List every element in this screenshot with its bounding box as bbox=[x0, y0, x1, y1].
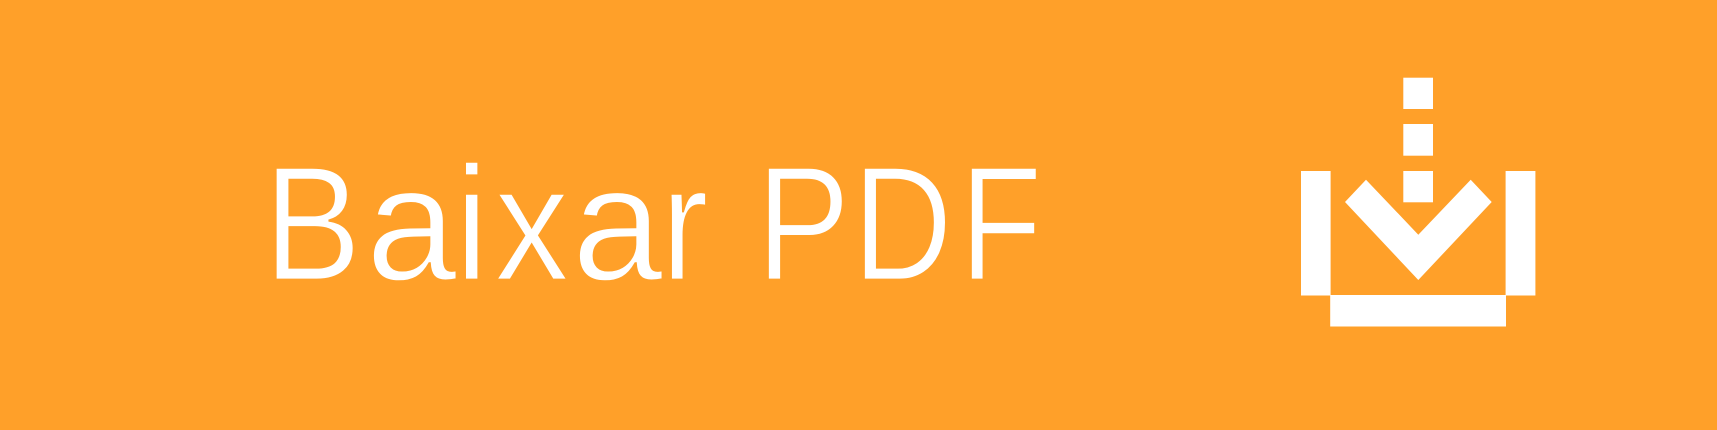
arrow head: chevron bbox=[1345, 180, 1492, 280]
heading: Baixar PDF: x bbox=[495, 133, 569, 315]
heading: Baixar PDF: a bbox=[366, 134, 457, 315]
heading: Baixar PDF: i bbox=[455, 134, 489, 315]
heading: Baixar PDF: F bbox=[960, 133, 1042, 315]
heading: Baixar PDF: B bbox=[264, 132, 361, 314]
icon: download arrow into tray bbox=[1301, 78, 1535, 326]
heading: Baixar PDF: D bbox=[853, 133, 953, 315]
heading: Baixar PDF bbox=[264, 132, 1042, 315]
heading: Baixar PDF: r bbox=[661, 134, 708, 315]
arrow shaft: dashed squares bbox=[1403, 78, 1433, 202]
heading: Baixar PDF: a bbox=[572, 134, 663, 315]
tray bbox=[1301, 171, 1535, 326]
heading: Baixar PDF: P bbox=[756, 133, 850, 315]
